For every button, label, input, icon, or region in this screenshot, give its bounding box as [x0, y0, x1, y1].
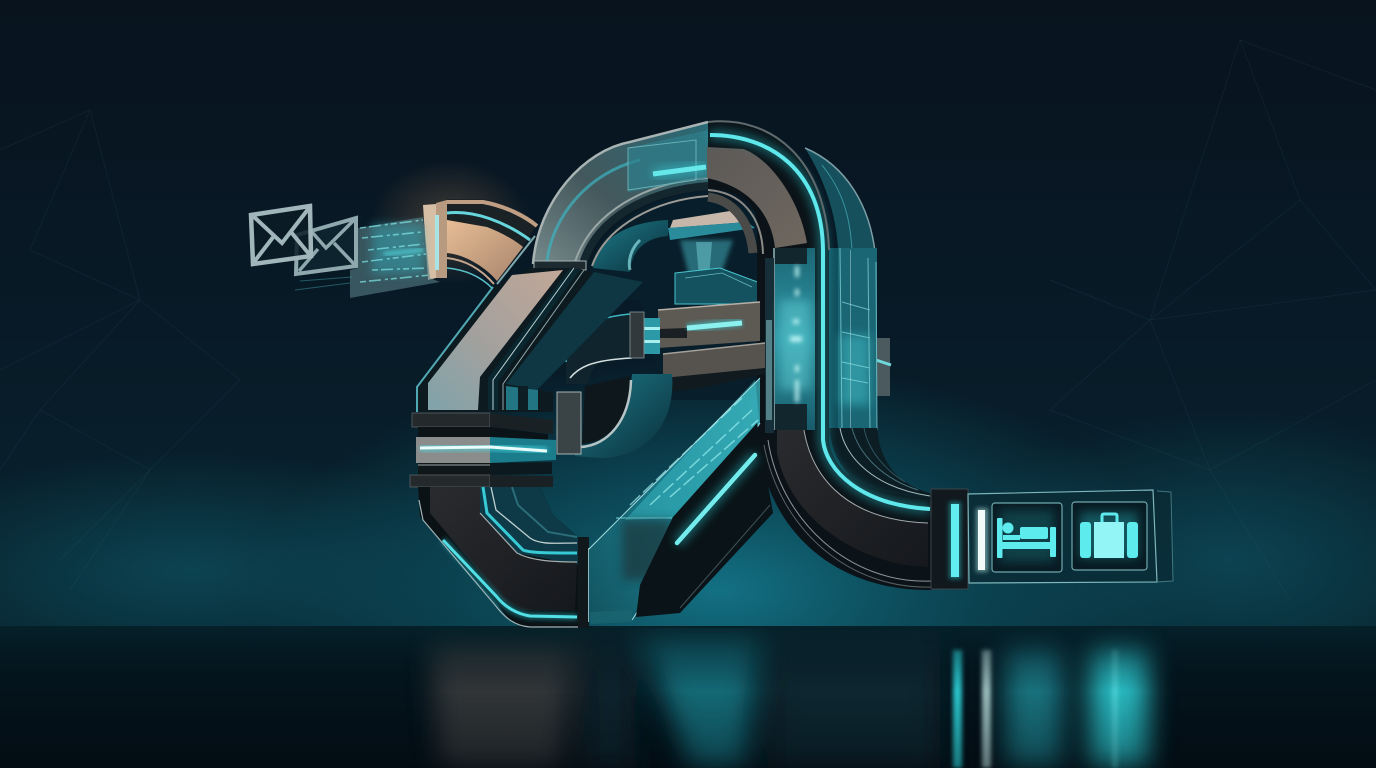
- icon: envelope front: [251, 206, 311, 264]
- vertical joint post: [578, 537, 632, 628]
- icon: envelope back: [296, 218, 356, 274]
- back channel of right elbow: [829, 428, 934, 512]
- icon card: bed: [992, 503, 1062, 572]
- main right arch and lower elbow: [707, 121, 932, 590]
- icon card: suitcase: [1072, 502, 1147, 570]
- left flange: [423, 200, 447, 280]
- right flange with glowing bars: [931, 489, 968, 589]
- brushed metal plate on arch: [707, 147, 807, 248]
- top glass panel with cyan bar: [628, 130, 708, 192]
- lower elbow plate: [777, 423, 928, 567]
- floor with reflections: [0, 626, 1376, 768]
- glass diagonal conduit: [588, 378, 760, 622]
- left warm elbow: [447, 199, 537, 288]
- teal inner channels: [480, 487, 578, 565]
- inner arch ring: [708, 190, 763, 254]
- brushed diagonal plate: [428, 270, 563, 410]
- left diagonal pipe: [417, 268, 643, 412]
- upper left curved glass arch: [533, 122, 708, 270]
- back glass arch and column: [805, 148, 934, 512]
- glass end box: [968, 490, 1173, 583]
- ring collar stack: [410, 413, 556, 487]
- curved center pipe and D fitting: [557, 312, 672, 458]
- dark brushed plate: [430, 487, 577, 610]
- outer highlight: [708, 121, 829, 250]
- cyan outer line: [443, 540, 577, 617]
- cyan glow line: [710, 135, 930, 509]
- hologram chamber inside arch: [590, 190, 762, 400]
- center glass column: [765, 248, 815, 433]
- stacked center modules: [640, 302, 765, 392]
- lower left elbow: [418, 487, 578, 628]
- dark diagonal housing with cyan bar: [636, 423, 773, 617]
- glass data stream: [295, 217, 440, 298]
